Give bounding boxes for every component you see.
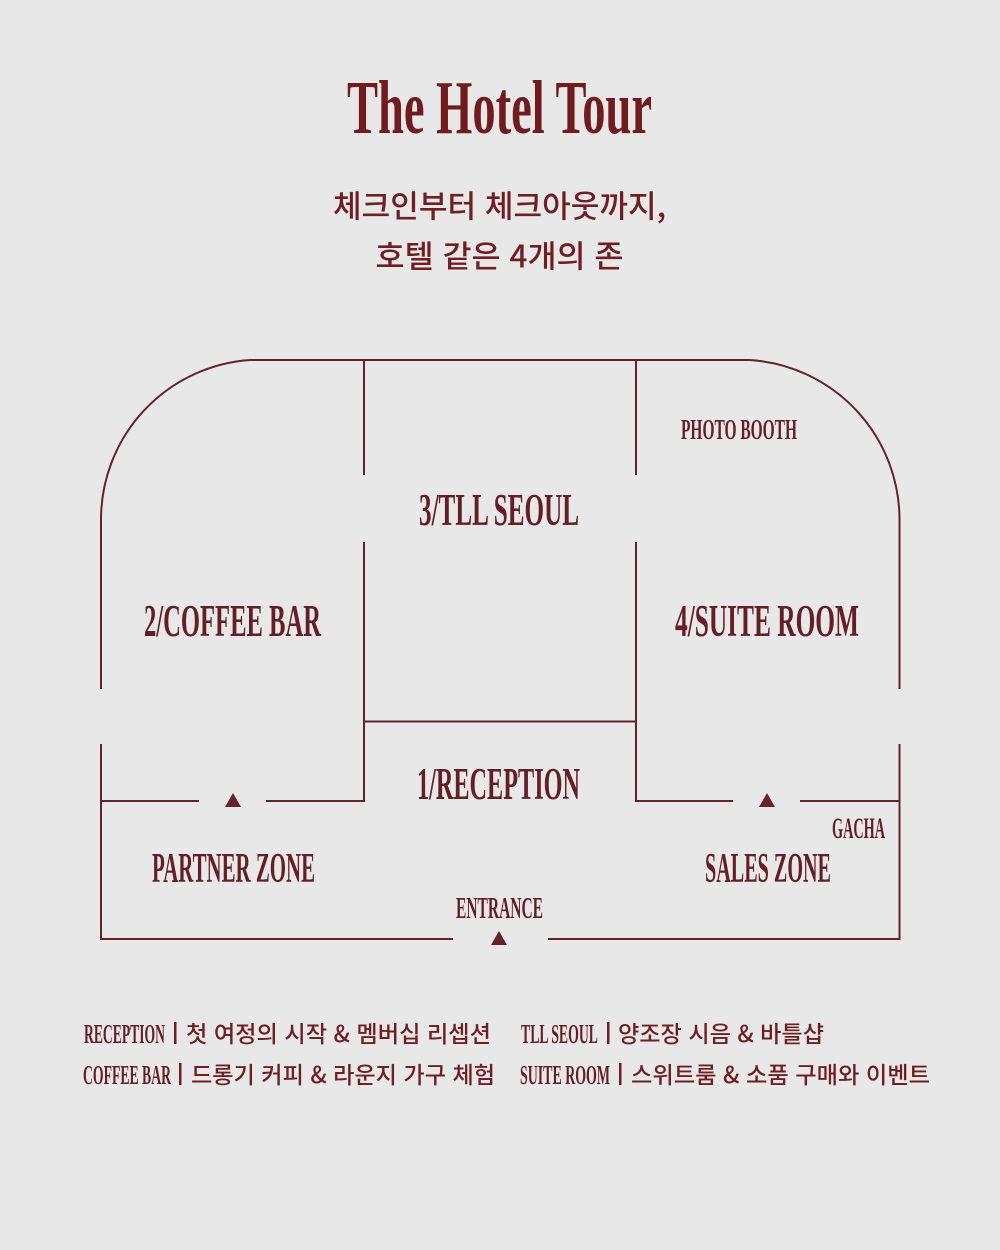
text: GACHA [832, 812, 885, 845]
outer wall: lower [101, 744, 900, 939]
subtitle: 호텔 같은 4개의 존 [376, 232, 624, 276]
text: PARTNER ZONE [152, 846, 315, 892]
legend: suite room: 스위트룸 & 소품 구매와 이벤트 [631, 1056, 930, 1090]
legend: TLL Seoul [521, 1015, 824, 1049]
legend: reception: RECEPTION [84, 1019, 165, 1049]
label: suite room: 4/SUITE ROOM [675, 596, 859, 646]
label: entrance: ENTRANCE [456, 890, 543, 925]
legend: suite room: SUITE ROOM [520, 1060, 610, 1090]
arrow: partner zone [225, 793, 241, 807]
legend: reception: 첫 여정의 시작 & 멤버십 리셉션 [186, 1015, 491, 1049]
legend: TLL Seoul: 양조장 시음 & 바틀샵 [618, 1015, 824, 1049]
legend: coffee bar: COFFEE BAR [83, 1060, 171, 1090]
label: coffee bar: 2/COFFEE BAR [144, 596, 321, 646]
subtitle: 체크인부터 체크아웃까지, [333, 182, 666, 226]
label: reception: 1/RECEPTION [417, 759, 580, 809]
label: photo booth: PHOTO BOOTH [681, 414, 797, 446]
interior walls: left [101, 360, 364, 801]
label: TLL Seoul: 3/TLL SEOUL [419, 485, 579, 535]
interior walls: right [636, 360, 899, 801]
arrow: entrance [491, 931, 507, 945]
title: The Hotel Tour [347, 66, 652, 150]
reception wall [364, 720, 636, 722]
legend: coffee bar: 드롱기 커피 & 라운지 가구 체험 [191, 1056, 495, 1090]
arrow: sales zone [759, 793, 775, 807]
floor plan [101, 360, 900, 939]
subtitle [333, 182, 666, 276]
text: SALES ZONE [705, 846, 831, 892]
legend: TLL Seoul: TLL SEOUL [521, 1019, 598, 1049]
outer wall: upper [101, 360, 900, 689]
